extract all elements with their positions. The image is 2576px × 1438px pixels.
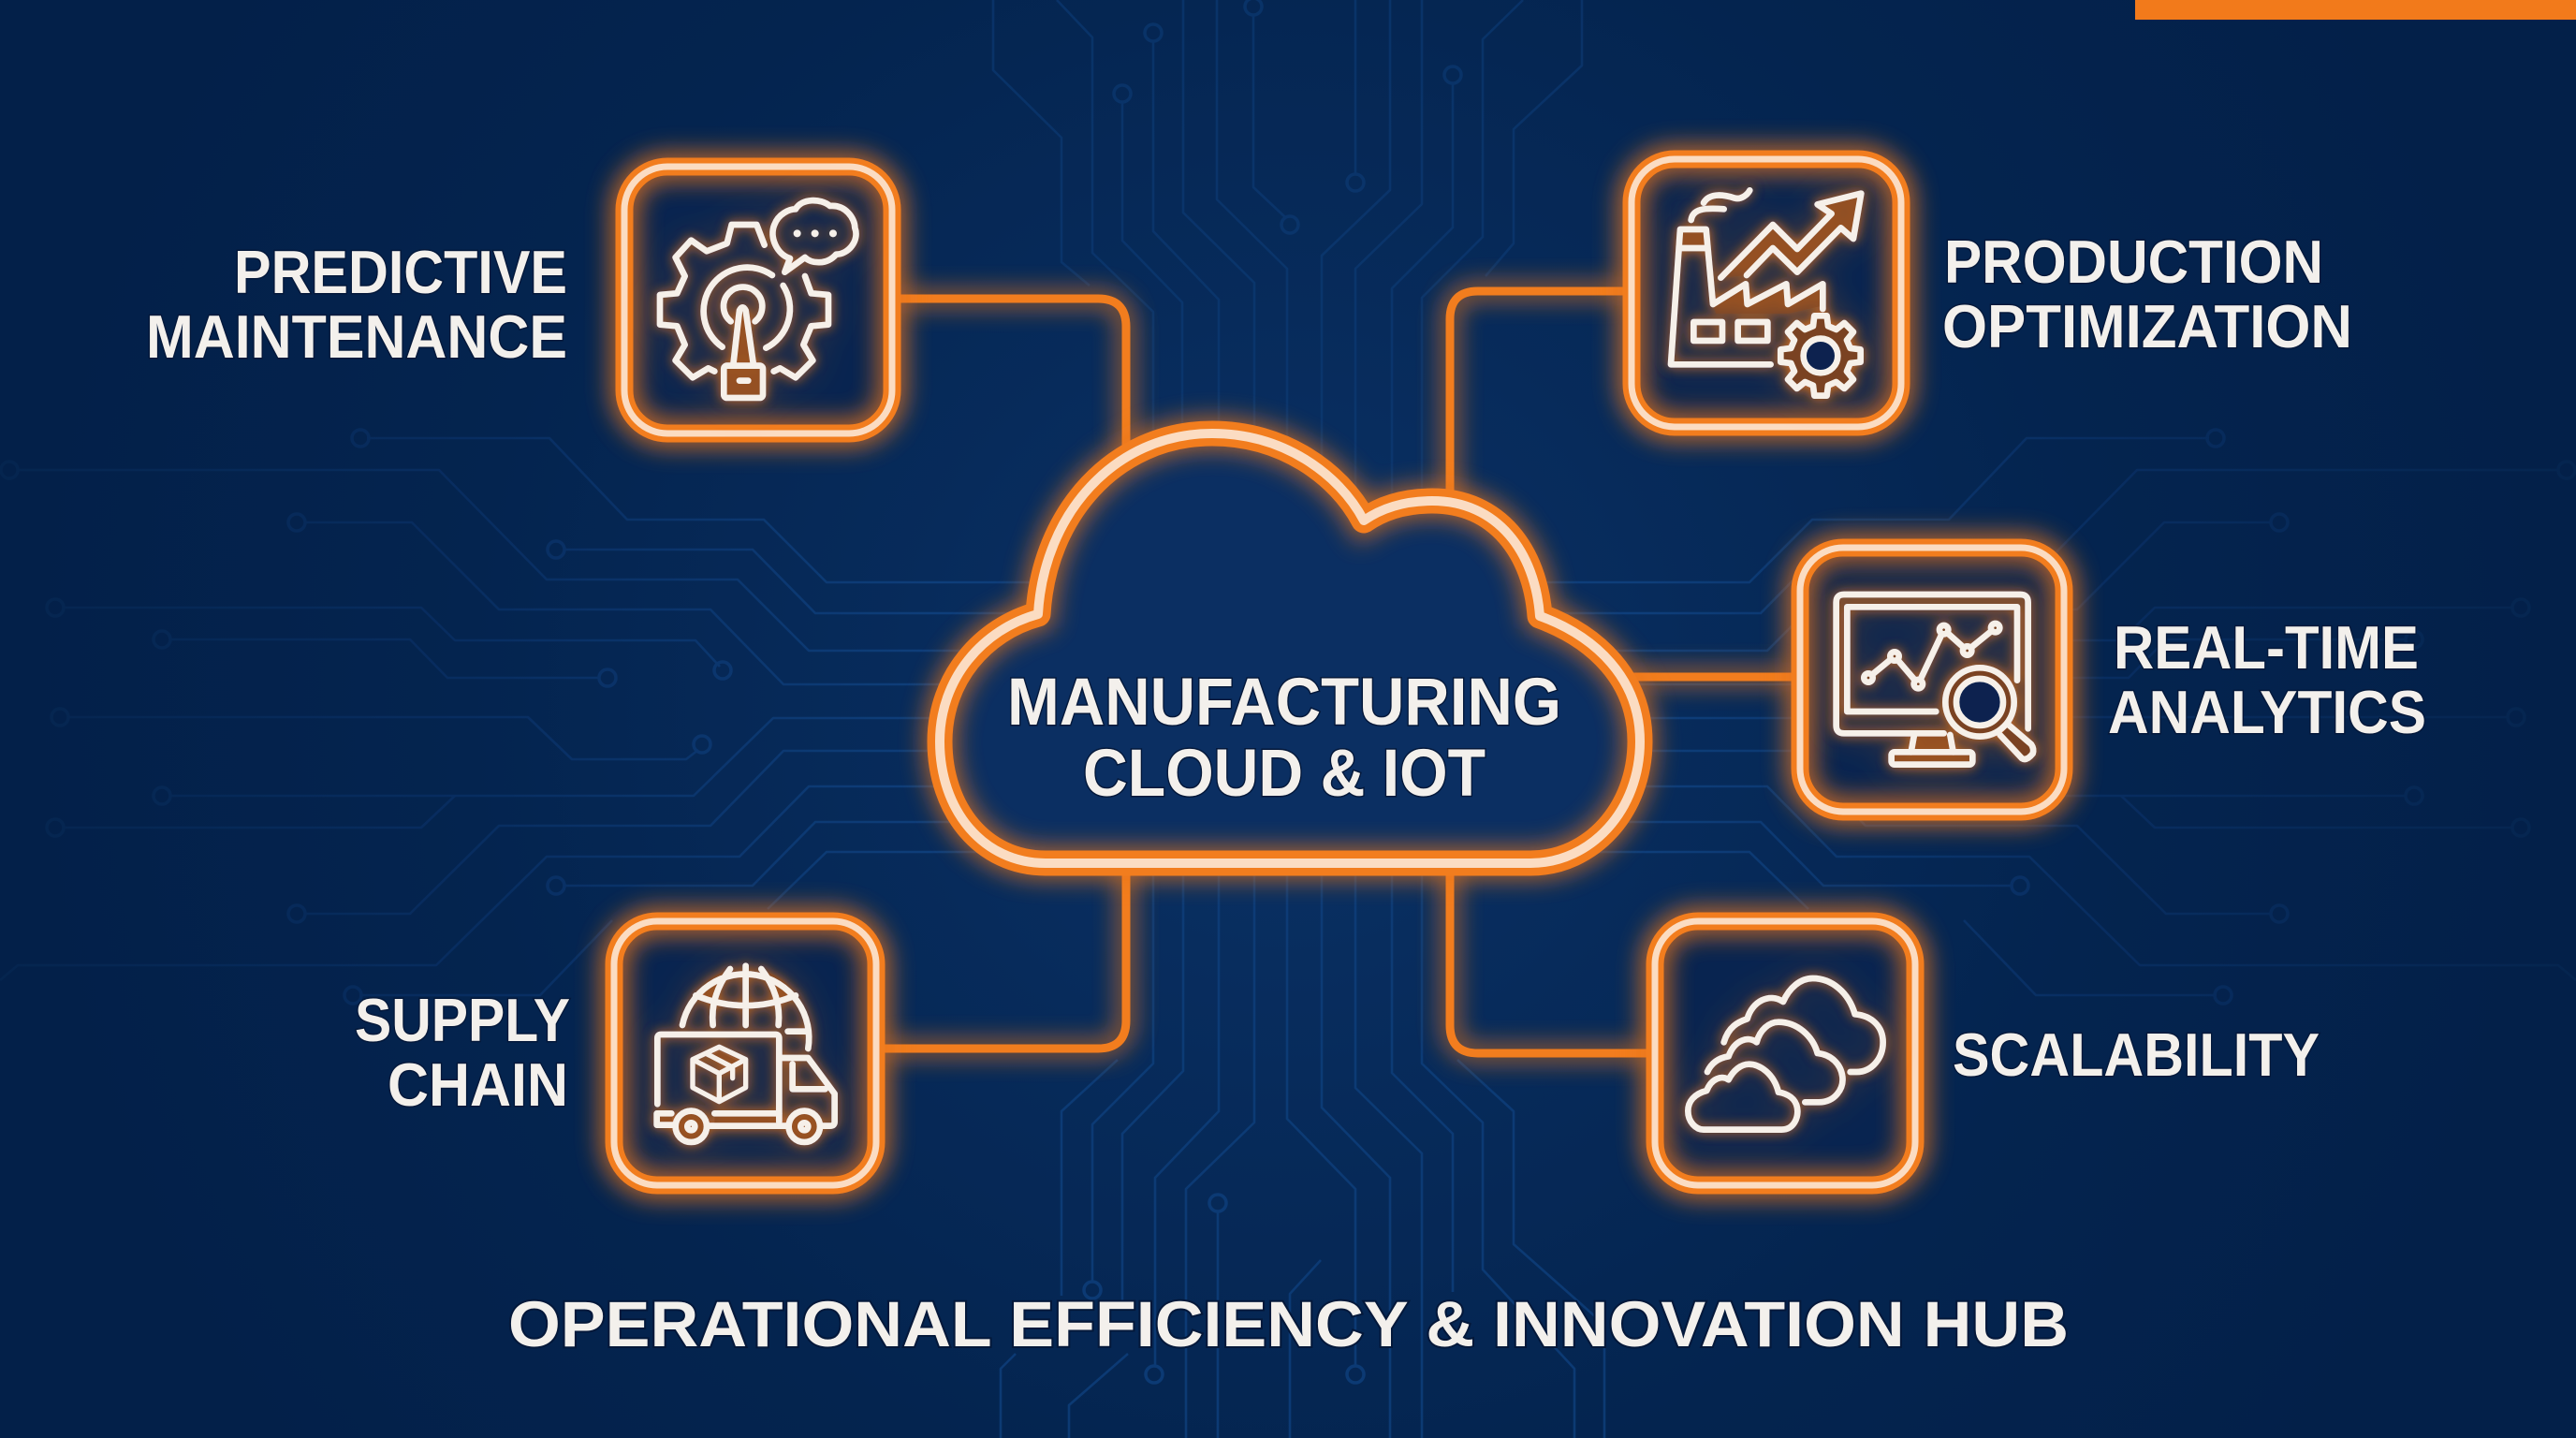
footer title: OPERATIONAL EFFICIENCY & INNOVATION HUB bbox=[508, 1288, 2069, 1360]
label: production optimization: PRODUCTION bbox=[1944, 227, 2323, 296]
label: real-time analytics: REAL-TIME bbox=[2114, 613, 2419, 682]
label: predictive maintenance bbox=[146, 238, 567, 371]
panel: predictive maintenance bbox=[624, 167, 892, 433]
panel: supply chain bbox=[614, 921, 876, 1185]
panel: real-time analytics bbox=[1800, 548, 2064, 812]
icon: monitor with chart and magnifier bbox=[1837, 594, 2033, 765]
label: scalability: SCALABILITY bbox=[1953, 1020, 2320, 1089]
icon: three stacked clouds bbox=[1688, 978, 1883, 1130]
label: supply chain bbox=[355, 986, 570, 1119]
label: supply chain: CHAIN bbox=[388, 1050, 568, 1119]
panel: scalability bbox=[1655, 921, 1915, 1185]
top-right orange accent bar bbox=[2135, 0, 2576, 20]
circuit traces: right bbox=[1546, 430, 2576, 1004]
icon: factory with rising arrow and gear bbox=[1671, 190, 1861, 396]
circuit traces: bottom centre bbox=[1001, 871, 1604, 1438]
label: real-time analytics: ANALYTICS bbox=[2108, 678, 2426, 746]
central cloud bbox=[940, 433, 1640, 863]
connectors bbox=[883, 291, 1793, 1053]
panel: production optimization bbox=[1632, 159, 1901, 427]
cloud heading: CLOUD & IOT bbox=[1083, 737, 1486, 811]
label: production optimization bbox=[1942, 227, 2352, 360]
icon: globe and delivery truck with parcel bbox=[657, 966, 835, 1145]
label: supply chain: SUPPLY bbox=[355, 986, 570, 1054]
icon: gear with antenna and speech bubble bbox=[660, 200, 856, 398]
label: real-time analytics bbox=[2108, 613, 2426, 746]
circuit traces: left bbox=[0, 430, 1030, 1004]
cloud heading bbox=[1007, 666, 1561, 811]
cloud heading: MANUFACTURING bbox=[1007, 666, 1561, 740]
circuit traces: top centre bbox=[993, 0, 1582, 506]
label: production optimization: OPTIMIZATION bbox=[1942, 292, 2352, 360]
label: predictive maintenance: PREDICTIVE bbox=[234, 238, 567, 306]
label: predictive maintenance: MAINTENANCE bbox=[146, 302, 567, 371]
